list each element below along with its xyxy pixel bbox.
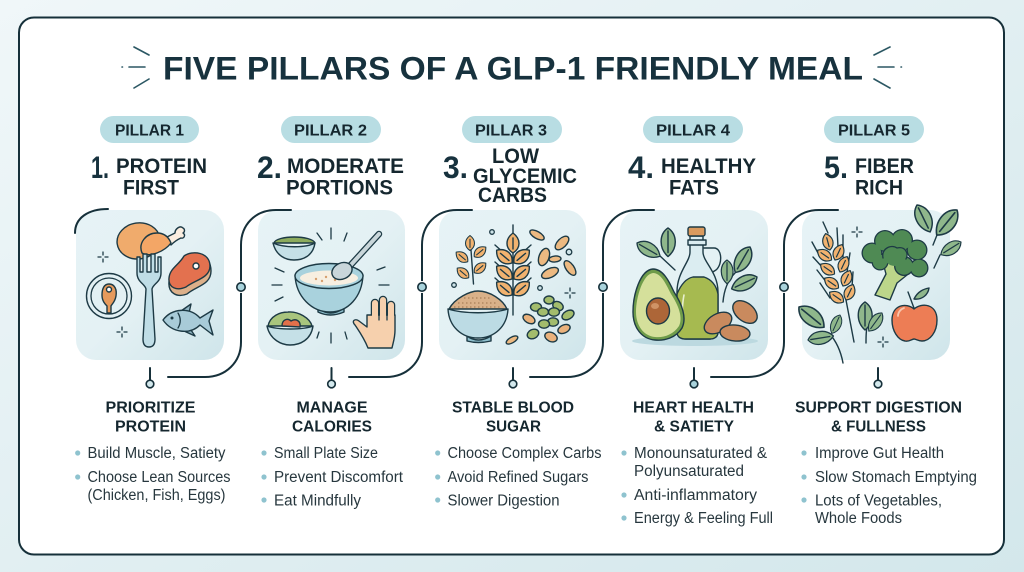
connector: pillar 3 to 4 — [530, 210, 654, 377]
badge: PILLAR 2 — [294, 122, 367, 140]
subheading: CALORIES — [292, 418, 372, 436]
panel: pillar 1 — [75, 116, 231, 504]
connector: pillar 1 to 2 — [168, 210, 291, 377]
heading: CARBS — [478, 183, 547, 207]
heading: PORTIONS — [286, 176, 393, 200]
bullet list: (Chicken, Fish, Eggs) — [88, 487, 226, 504]
bullet list: Small Plate Size — [274, 445, 378, 462]
icon: sparkles — [98, 252, 127, 337]
subheading: SUPPORT DIGESTION — [795, 400, 962, 416]
icon: top-right leaves — [911, 202, 964, 268]
bullet list: Prevent Discomfort — [274, 469, 404, 486]
icon: fork — [137, 254, 161, 347]
icon: apple — [892, 288, 937, 341]
icon: plate — [86, 274, 132, 318]
icon: fish — [163, 304, 213, 336]
title text: FIVE PILLARS OF A GLP-1 FRIENDLY MEAL — [163, 50, 863, 86]
badge — [281, 116, 381, 143]
bullet list — [621, 445, 773, 527]
subheading: PROTEIN — [115, 418, 186, 436]
heading: 4. — [628, 149, 654, 185]
heading: FIRST — [123, 176, 179, 200]
stem — [146, 368, 154, 388]
heading — [824, 149, 914, 200]
icon: broccoli — [862, 229, 928, 300]
bullet list: Lots of Vegetables, — [815, 492, 942, 510]
heading: LOW — [492, 144, 540, 168]
stem — [509, 368, 517, 388]
subheading — [452, 400, 574, 436]
heading: 3. — [443, 149, 468, 185]
bullet list: Choose Lean Sources — [88, 469, 231, 486]
icon: main bowl — [295, 264, 363, 315]
panel: pillar 3 — [435, 116, 602, 510]
subheading: HEART HEALTH — [633, 400, 754, 416]
subheading — [106, 400, 196, 436]
subheading — [633, 400, 754, 436]
icon: top bowl — [273, 237, 315, 260]
bullet list: Anti-inflammatory — [634, 487, 757, 504]
heading: RICH — [855, 176, 903, 200]
icon: left sparkle — [122, 47, 149, 88]
badge — [643, 116, 743, 143]
bullet list — [801, 445, 977, 527]
icon: center sprig — [858, 302, 887, 343]
icon panel background — [802, 210, 950, 360]
subheading: PRIORITIZE — [106, 400, 196, 416]
icon: seeds and sparkle — [452, 230, 575, 298]
heading: FATS — [669, 176, 719, 200]
icon: right leaves — [721, 243, 760, 302]
heading — [443, 144, 577, 207]
icon: wheat stalk — [812, 222, 858, 342]
icon: steak — [169, 253, 211, 295]
icon panel background — [258, 210, 405, 360]
panel: pillar 2 — [257, 116, 405, 510]
icon: chicken drumstick — [115, 220, 184, 262]
icon: avocado — [633, 269, 684, 340]
bullet list: Build Muscle, Satiety — [88, 445, 226, 462]
icon panel background — [620, 210, 768, 360]
icon: almonds — [701, 296, 762, 342]
bullet list: Polyunsaturated — [634, 463, 744, 480]
heading: 5. — [824, 149, 848, 185]
icon panel background — [439, 210, 586, 360]
panel: pillar 5 — [794, 116, 977, 527]
icon: grain bowl — [448, 291, 508, 342]
icon: small sprig — [453, 236, 489, 284]
icon: bottom-left leaves — [794, 301, 845, 363]
subheading: MANAGE — [296, 400, 368, 416]
icon: shadow — [632, 336, 758, 346]
icon: bottom bowl — [267, 312, 313, 345]
bullet list: Slow Stomach Emptying — [815, 469, 977, 486]
bullet list: Choose Complex Carbs — [448, 445, 602, 462]
icon panel background — [76, 210, 224, 360]
bullet list: Whole Foods — [815, 510, 902, 527]
bullet list: Monounsaturated & — [634, 445, 768, 462]
subheading: SUGAR — [486, 418, 541, 436]
heading: PROTEIN — [116, 154, 207, 178]
icon: oats — [505, 228, 578, 346]
icon: beans — [521, 296, 576, 344]
heading: FIBER — [855, 154, 914, 178]
badge — [824, 116, 924, 143]
heading: GLYCEMIC — [473, 164, 577, 188]
bullet list — [75, 445, 231, 504]
icon: oil bottle — [677, 227, 721, 339]
badge — [462, 116, 562, 143]
badge: PILLAR 5 — [838, 122, 910, 140]
connector: start arc — [75, 209, 108, 233]
bullet list: Slower Digestion — [448, 492, 560, 510]
bullet list: Eat Mindfully — [274, 492, 361, 510]
subheading: & FULLNESS — [831, 418, 926, 436]
icon: left leaves — [634, 228, 675, 270]
subheading: & SATIETY — [654, 418, 734, 436]
heading: HEALTHY — [661, 154, 756, 178]
icon: hand — [353, 300, 395, 348]
badge — [100, 116, 199, 143]
icon: right sparkle — [874, 47, 902, 88]
badge: PILLAR 4 — [656, 122, 730, 140]
bullet list: Energy & Feeling Full — [634, 510, 773, 527]
bullet list: Improve Gut Health — [815, 445, 944, 462]
bullet list — [261, 445, 404, 510]
title — [122, 47, 902, 88]
icon: rays — [272, 228, 389, 343]
heading — [91, 149, 207, 200]
stem — [690, 368, 698, 388]
badge: PILLAR 1 — [115, 122, 184, 140]
heading — [257, 149, 404, 200]
connector: pillar 2 to 3 — [349, 210, 472, 377]
stem — [874, 368, 882, 388]
panel: pillar 4 — [620, 116, 773, 527]
heading: 1. — [91, 149, 109, 185]
connector: pillar 4 to 5 — [711, 210, 838, 377]
bullet list: Avoid Refined Sugars — [448, 469, 589, 486]
subheading — [795, 400, 962, 436]
icon: sparkles — [852, 227, 888, 347]
icon: spoon — [329, 234, 379, 283]
bullet list — [435, 445, 602, 510]
heading — [628, 149, 756, 200]
badge: PILLAR 3 — [475, 122, 547, 140]
heading: MODERATE — [287, 154, 404, 178]
subheading — [292, 400, 372, 436]
heading: 2. — [257, 149, 282, 185]
subheading: STABLE BLOOD — [452, 400, 574, 416]
stem — [328, 368, 335, 388]
icon: wheat — [493, 225, 533, 315]
